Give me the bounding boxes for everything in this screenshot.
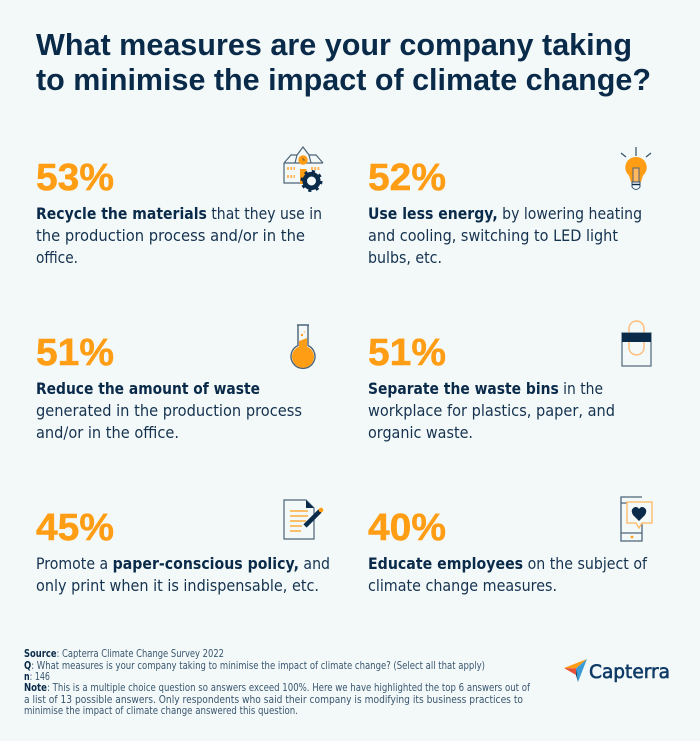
text: educate description: Educate employees on the subject of bbox=[368, 554, 647, 573]
text: waste description: generated in the production process bbox=[36, 401, 302, 420]
text: educate description bbox=[368, 554, 647, 595]
panel: reduce waste bbox=[36, 325, 315, 442]
text: waste description bbox=[36, 379, 302, 442]
text: recycle description: the production process and/or in the bbox=[36, 226, 305, 245]
text: bins description: organic waste. bbox=[368, 423, 473, 442]
logo: Capterra: Capterra bbox=[589, 661, 670, 683]
title: What measures are your company taking bbox=[36, 27, 632, 62]
panel: separate bins bbox=[368, 321, 651, 442]
text: waste description: and/or in the office. bbox=[36, 423, 179, 442]
panel: use less energy bbox=[368, 147, 651, 267]
text: paper description: only print when it is indispensable, etc. bbox=[36, 576, 319, 595]
text: bins description: workplace for plastics, paper, and bbox=[368, 401, 615, 420]
text: energy description bbox=[368, 204, 642, 267]
footnotes: n: 146 bbox=[24, 671, 50, 683]
footnotes: Note: This is a multiple choice question so answers exceed 100%. Here we have highlighted the top 6 answers out of bbox=[24, 682, 530, 694]
stat: 51%: 51% bbox=[368, 332, 446, 374]
logo: Capterra bbox=[564, 659, 670, 683]
text: energy description: bulbs, etc. bbox=[368, 248, 442, 267]
text: paper description: Promote a paper-conscious policy, and bbox=[36, 554, 330, 573]
text: recycle description: office. bbox=[36, 248, 78, 267]
text: energy description: and cooling, switching to LED light bbox=[368, 226, 618, 245]
title: to minimise the impact of climate change? bbox=[36, 62, 651, 97]
stat: 52%: 52% bbox=[368, 157, 446, 199]
footnotes: minimise the impact of climate change answered this question. bbox=[24, 705, 298, 717]
footnotes: Source: Capterra Climate Change Survey 2022 bbox=[24, 648, 224, 660]
text: energy description: Use less energy, by lowering heating bbox=[368, 204, 642, 223]
icon: bag bbox=[622, 321, 651, 366]
stat: 51%: 51% bbox=[36, 332, 114, 374]
icon: document with pen bbox=[284, 500, 323, 539]
panel: educate employees bbox=[368, 497, 652, 595]
footnotes: a list of 13 possible answers. Only respondents who said their company is modifying its business practices to bbox=[24, 694, 523, 706]
text: educate description: climate change measures. bbox=[368, 576, 557, 595]
stat: 53%: 53% bbox=[36, 157, 114, 199]
footnotes bbox=[24, 648, 530, 717]
icon: flask bbox=[291, 325, 315, 368]
icon: building with gear bbox=[284, 147, 323, 191]
icon: phone with heart message bbox=[621, 497, 652, 541]
title bbox=[36, 27, 651, 97]
panel: recycle materials bbox=[36, 147, 323, 267]
panel: paper policy bbox=[36, 500, 330, 595]
text: recycle description: Recycle the materials that they use in bbox=[36, 204, 322, 223]
text: bins description bbox=[368, 379, 615, 442]
text: bins description: Separate the waste bins in the bbox=[368, 379, 603, 398]
text: recycle description bbox=[36, 204, 322, 267]
footnotes: Q: What measures is your company taking to minimise the impact of climate change? (Select all that apply) bbox=[24, 660, 485, 672]
stat: 45%: 45% bbox=[36, 507, 114, 549]
icon: light bulb bbox=[621, 147, 651, 190]
text: paper description bbox=[36, 554, 330, 595]
text: waste description: Reduce the amount of waste bbox=[36, 379, 260, 398]
stat: 40%: 40% bbox=[368, 507, 446, 549]
